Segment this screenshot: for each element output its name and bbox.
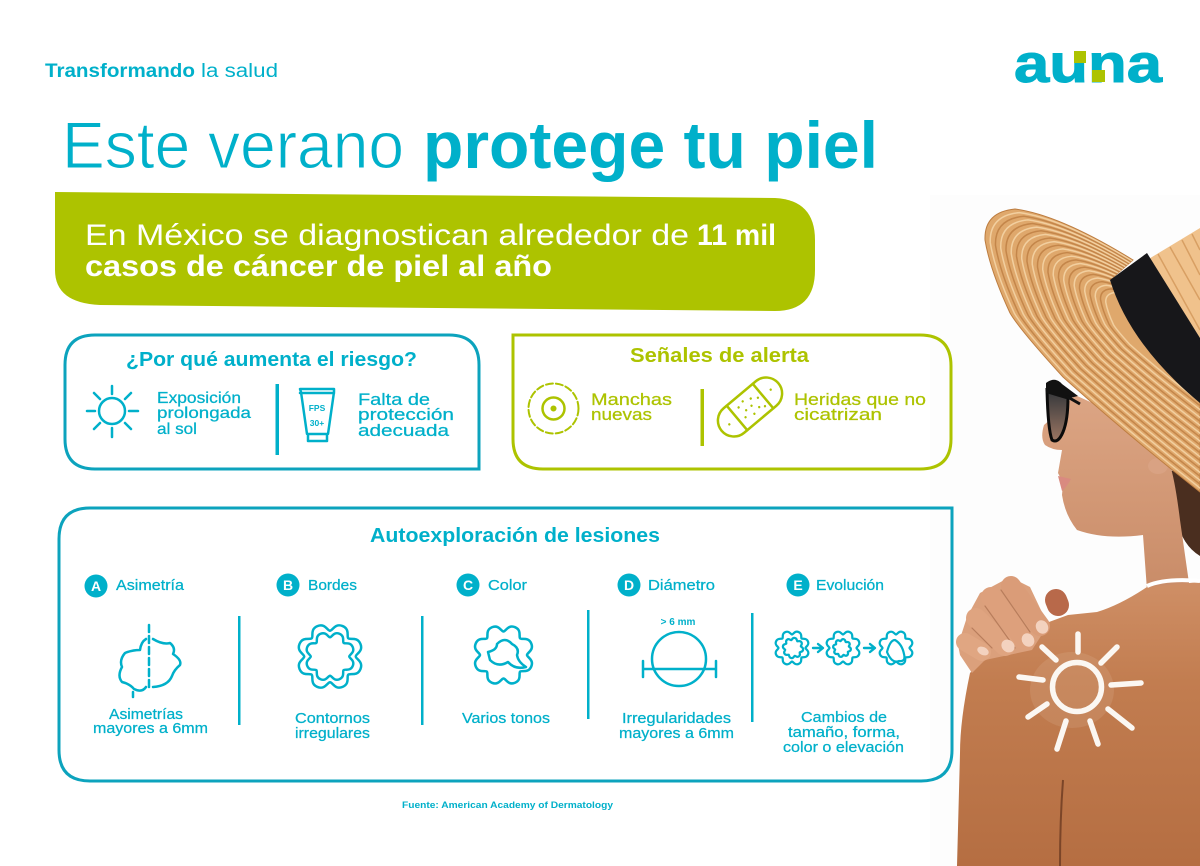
icon: irregular contours [287, 613, 373, 700]
icon: diameter gauge [643, 617, 716, 686]
column B: borders [276, 574, 373, 742]
text: new spots: nuevas [591, 405, 652, 424]
title [62, 108, 878, 182]
icon: asymmetric lesion [120, 625, 180, 697]
column E: evolution: color o elevación [783, 739, 904, 756]
header tagline: Transformando [45, 61, 195, 82]
logo: auna: auna [1014, 34, 1163, 94]
ear [1148, 458, 1168, 474]
panel: self examination [59, 508, 952, 781]
self examination heading: Autoexploración de lesiones [370, 525, 660, 547]
column C: color: Varios tonos [462, 710, 550, 727]
column A: asymmetry: mayores a 6mm [93, 720, 208, 737]
text: sun exposure: prolongada [157, 405, 251, 422]
hair [1170, 470, 1200, 556]
column B: borders: irregulares [295, 725, 370, 742]
icon: sun [87, 386, 138, 437]
column A: asymmetry: Asimetría [116, 578, 185, 594]
badge E: E [793, 577, 803, 593]
badge D: D [624, 577, 634, 593]
column A: asymmetry [84, 574, 208, 737]
sunglasses [1046, 380, 1080, 441]
icon: diameter gauge: > 6 mm [661, 617, 695, 628]
title: protege tu piel [423, 108, 878, 182]
column B: borders: Bordes [308, 578, 357, 594]
source note: Fuente: American Academy of Dermatology [402, 800, 614, 811]
fingernails [976, 618, 1051, 657]
hand [958, 577, 1058, 673]
text: new spots: Manchas [591, 390, 672, 409]
text: lack of protection: adecuada [358, 422, 450, 440]
column E: evolution: Evolución [816, 578, 884, 594]
text: lack of protection: Falta de [358, 391, 430, 409]
icon: sunscreen tube: 30+ [310, 418, 324, 428]
column E: evolution: tamaño, forma, [788, 724, 900, 741]
text: unhealed wounds: cicatrizan [794, 405, 882, 424]
text: sun exposure: al sol [157, 421, 197, 438]
badge C [456, 574, 480, 596]
icon: bandage [711, 371, 789, 443]
back crease [1060, 780, 1063, 866]
badge B: B [283, 577, 293, 593]
text: new spots [591, 390, 672, 424]
photo: woman with hat and sun drawn in sunscreen [957, 209, 1200, 866]
badge A [84, 574, 108, 598]
column D: diameter: Diámetro [648, 578, 715, 594]
straw hat [984, 208, 1200, 492]
column D: diameter: Irregularidades [622, 710, 731, 727]
lips [1058, 476, 1071, 491]
column C: color [456, 574, 550, 727]
title: Este verano [62, 108, 404, 182]
column B: borders: Contornos [295, 710, 370, 727]
badge C: C [463, 577, 473, 593]
text: sun exposure: Exposición [157, 390, 241, 407]
badge B [276, 574, 300, 596]
badge D [618, 574, 640, 596]
icon: lesion evolution [769, 625, 919, 671]
icon: spot [528, 384, 578, 434]
hat band [1110, 253, 1200, 403]
text: lack of protection [358, 391, 454, 440]
face and neck [1042, 395, 1190, 590]
header tagline: la salud [201, 61, 278, 82]
text: unhealed wounds: Heridas que no [794, 390, 926, 409]
photo backdrop [930, 195, 1200, 866]
sunscreen sun [1019, 634, 1141, 749]
text: lack of protection: protección [358, 406, 454, 424]
icon: several tones [464, 616, 543, 694]
torso [957, 582, 1200, 866]
column E: evolution: Cambios de [801, 709, 887, 726]
badge A: A [91, 578, 101, 594]
icon: sunscreen tube: FPS [309, 403, 326, 413]
text: sun exposure [157, 390, 251, 438]
column D: diameter: mayores a 6mm [619, 725, 734, 742]
column A: asymmetry: Asimetrías [109, 706, 183, 723]
swimsuit strap [1147, 580, 1200, 586]
header tagline [45, 61, 278, 82]
warning heading: Señales de alerta [630, 345, 810, 367]
panel: risk factors [65, 335, 479, 469]
risk heading: ¿Por qué aumenta el riesgo? [126, 349, 417, 371]
banner: statistic: En México se diagnostican alrededor de [85, 219, 689, 252]
column C: color: Color [488, 578, 527, 594]
column D: diameter [618, 574, 734, 742]
panel: warning signs [513, 335, 951, 469]
banner: statistic [55, 192, 815, 311]
banner: statistic: casos de cáncer de piel al año [85, 250, 552, 283]
column E: evolution [769, 574, 919, 756]
badge E [786, 574, 810, 596]
icon: sunscreen tube [300, 389, 334, 441]
banner: statistic: 11 mil [697, 219, 776, 252]
text: unhealed wounds [794, 390, 926, 424]
